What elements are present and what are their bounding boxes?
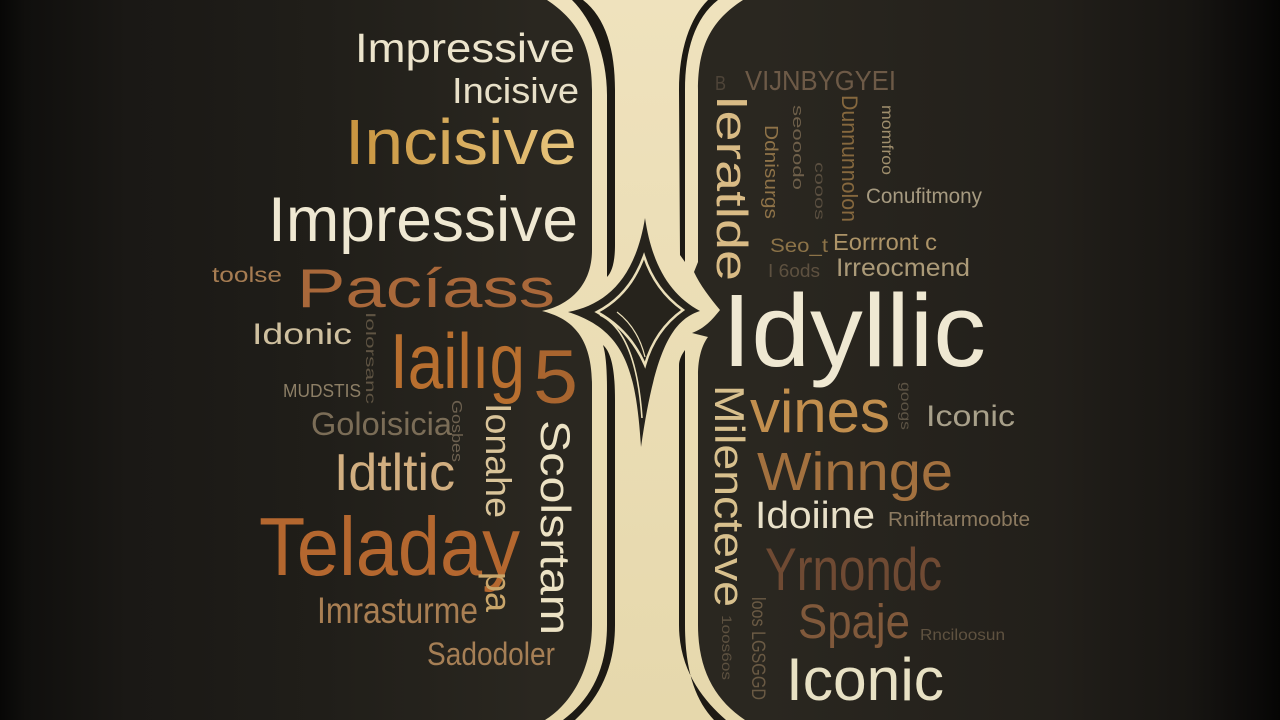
vertical word: Milencteve: Milencteve — [706, 385, 753, 607]
vertical small word: right column: loos LGSGGD — [747, 597, 768, 700]
stripe: upper left — [572, 0, 615, 277]
vertical small word: momfroo — [878, 105, 895, 175]
word: Iailing: Iailıg — [390, 317, 525, 405]
word: Rnciloosun: Rnciloosun — [920, 627, 1005, 644]
word: Irreocmend: Irreocmend — [836, 254, 970, 282]
word: Yrnondc: Yrnondc — [765, 536, 942, 603]
word: Incisive gold: Incisive — [345, 106, 577, 178]
vertical small word: left column: 1oos6os — [719, 615, 735, 680]
word: Teladay: Teladay — [259, 500, 520, 593]
word: Spaje: Spaje — [798, 596, 910, 649]
word: Pacíass: Pacíass — [297, 257, 555, 319]
word: Winnge: Winnge — [757, 442, 953, 502]
glyph: five: 5 — [533, 335, 578, 420]
word: VIJNBYGYEI: VIJNBYGYEI — [745, 65, 896, 96]
central cream column — [542, 0, 745, 720]
word: 6ods: I 6ods — [768, 261, 820, 281]
word: Eorrront c: Eorrront c — [833, 229, 937, 255]
word: MUSIS: MUDSTIS — [283, 381, 361, 401]
word: Idoiine: Idoiine — [755, 495, 875, 537]
word: vines: vines — [750, 378, 890, 445]
vertical word: Ionahe: Ionahe — [478, 403, 519, 518]
vertical word: pa: pa — [478, 572, 519, 613]
vertical word: Ieratlde: Ieratlde — [707, 95, 756, 281]
stripe: lower left — [563, 345, 615, 720]
glyph: B: B — [715, 73, 726, 95]
ornament: four-point star — [568, 218, 700, 447]
vertical small word: Dunnunnolon — [837, 95, 862, 222]
vertical small word: Iolorsanc — [363, 312, 379, 404]
word: Imrasturme: Imrasturme — [317, 590, 478, 631]
right word cloud — [706, 65, 1030, 713]
vertical small word: seooodo — [789, 105, 806, 190]
vertical word: Scolsrtam: Scolsrtam — [532, 420, 579, 635]
word: Goloisicia: Goloisicia — [311, 406, 452, 442]
left word cloud — [212, 25, 579, 672]
word: Idtltic: Idtltic — [334, 444, 455, 502]
stripe: upper right — [679, 0, 718, 262]
word: Iconic large: Iconic — [786, 646, 944, 713]
word: Idyllic: Idyllic — [722, 273, 986, 388]
word: Seo_t: Seo_t — [770, 236, 829, 257]
word: Incisive small: Incisive — [452, 70, 579, 111]
stripe: lower right — [679, 350, 726, 720]
word: Conufitmony: Conufitmony — [866, 185, 982, 208]
word: Impressive small: Impressive — [355, 25, 575, 71]
word: Impressive large: Impressive — [268, 185, 578, 255]
word: Iconic small: Iconic — [926, 400, 1015, 433]
word: Rnifhtarmoobte: Rnifhtarmoobte — [888, 509, 1030, 531]
vertical small word: Ddnisurgs — [761, 125, 781, 219]
vertical small word: googs — [898, 382, 914, 430]
word: Sadodoler: Sadodoler — [427, 636, 555, 672]
word: toolse: toolse — [212, 264, 282, 287]
vertical small word: Gosbes — [448, 400, 465, 462]
word: Idonic: Idonic — [252, 318, 352, 351]
vertical small word: cooos — [812, 162, 828, 220]
